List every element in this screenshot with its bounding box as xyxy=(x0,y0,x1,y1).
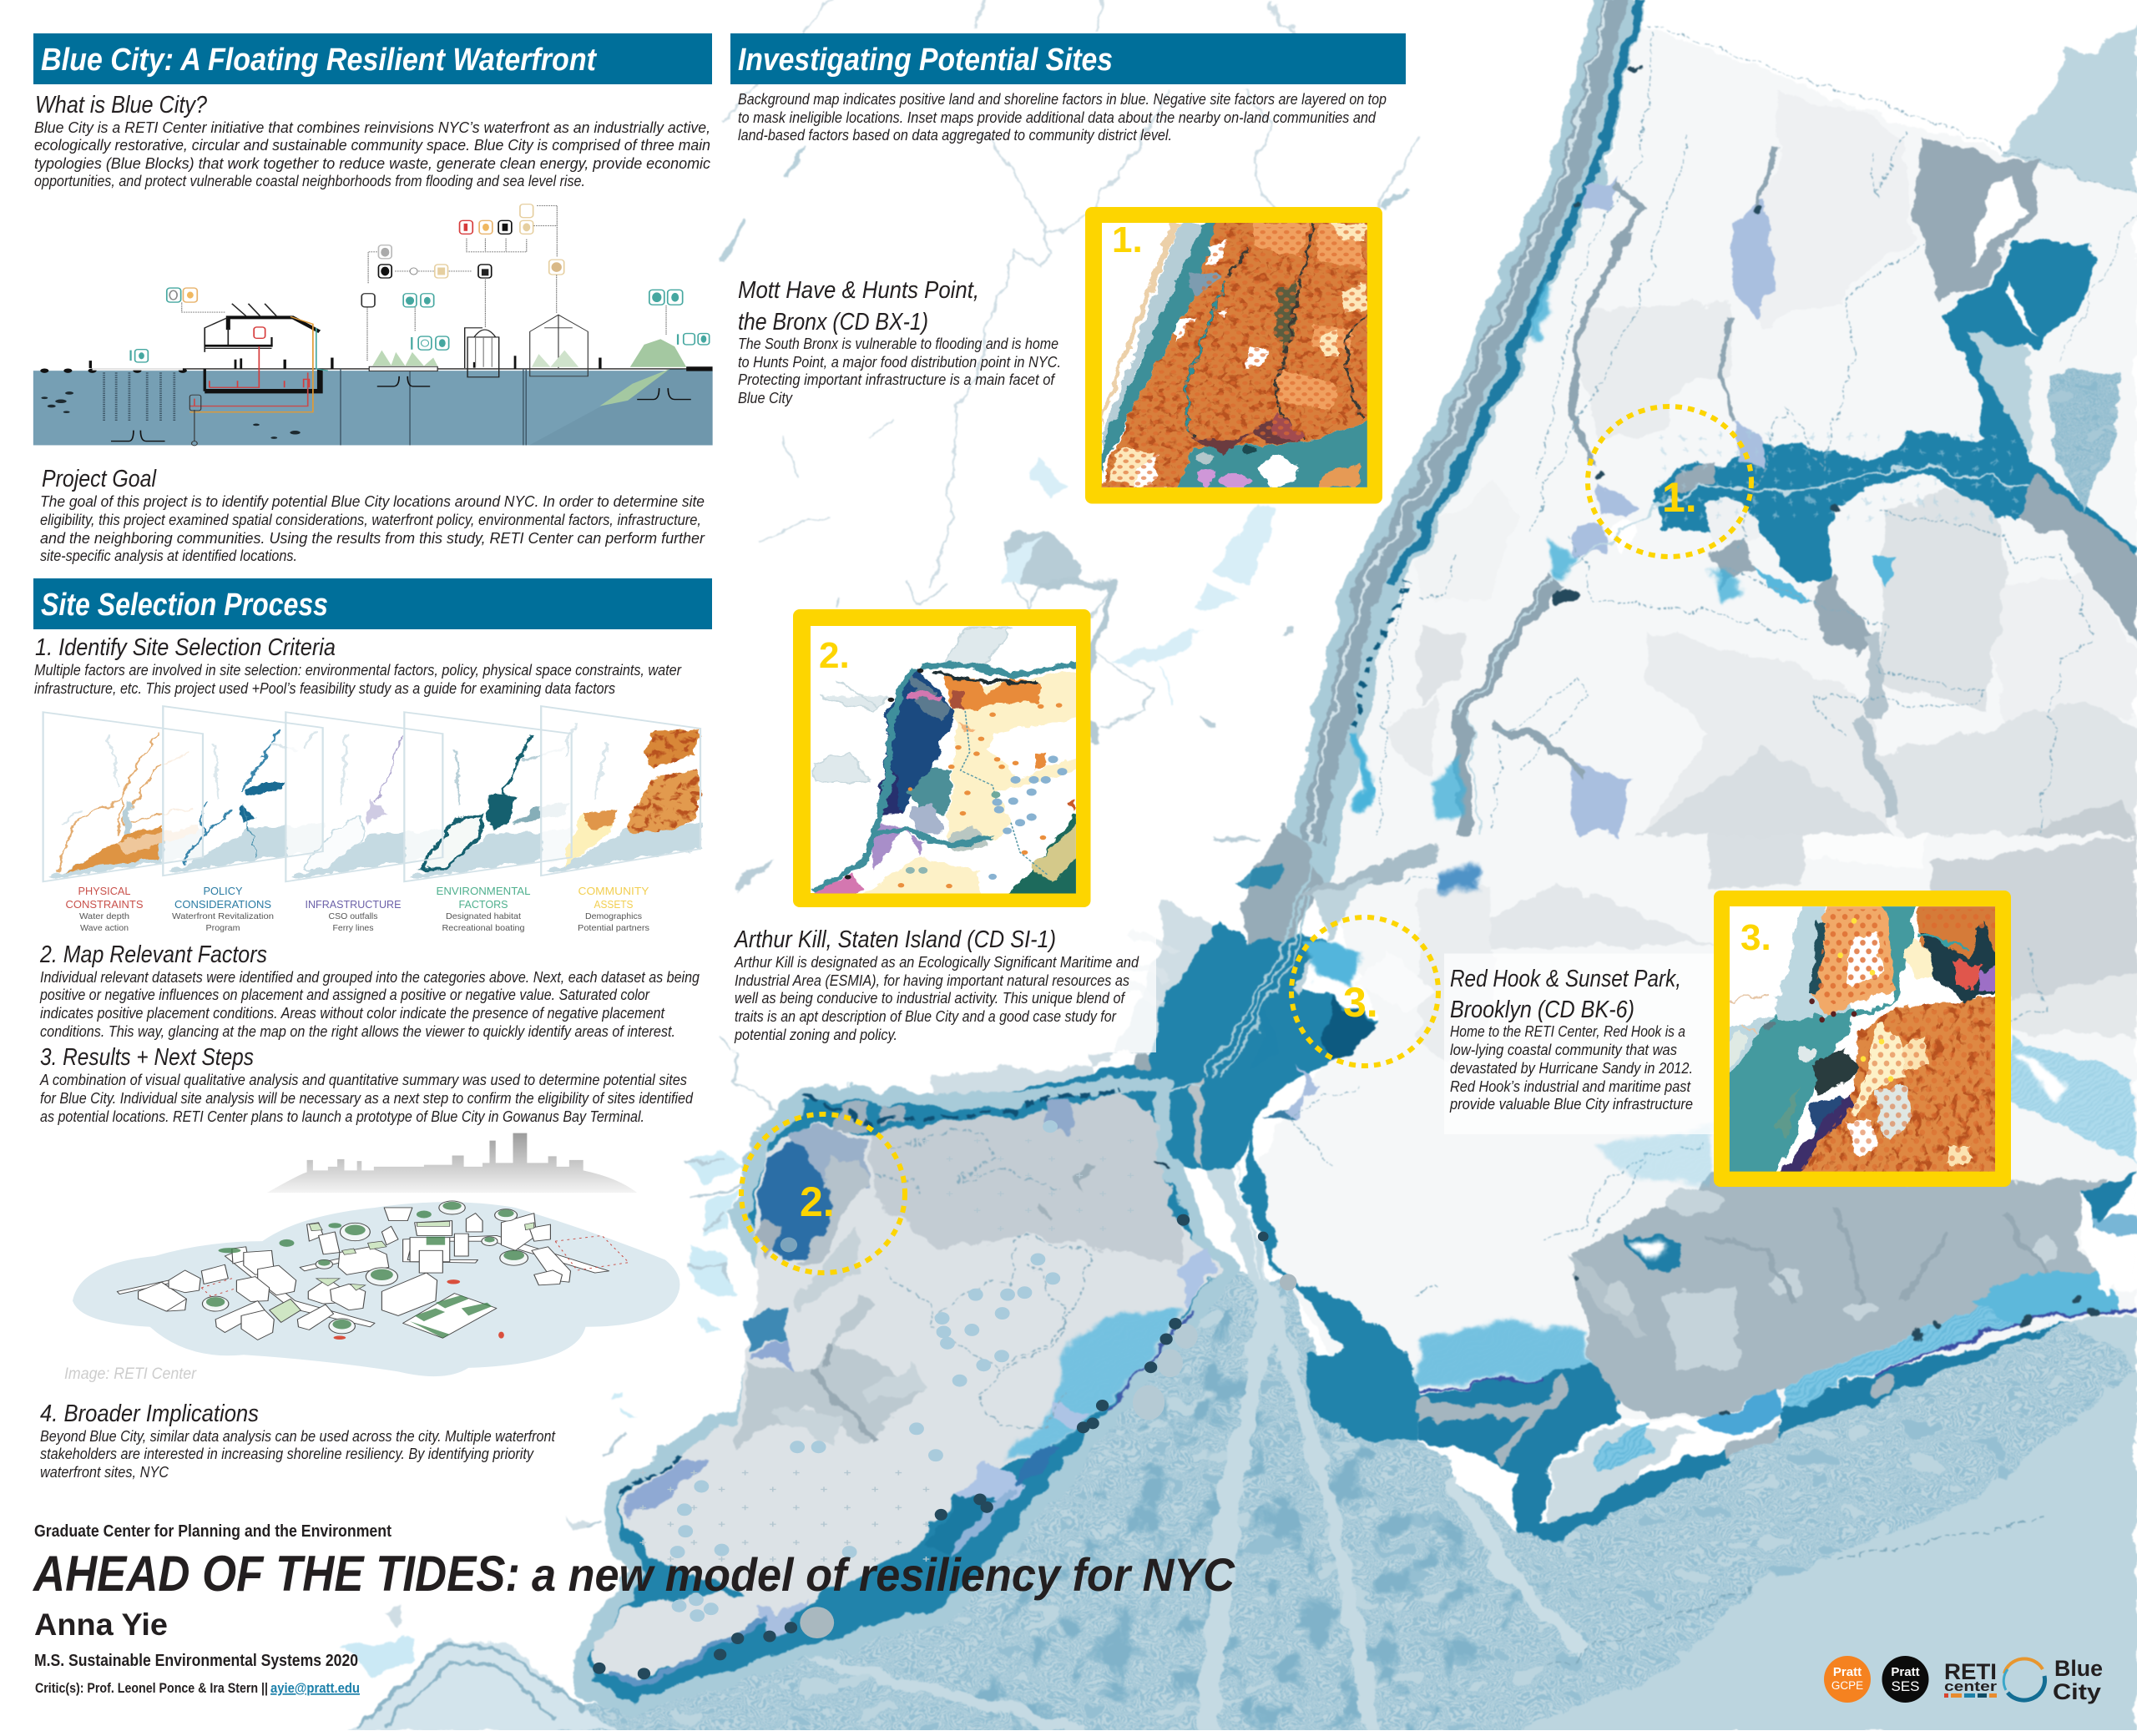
site marker 1 xyxy=(1588,406,1751,557)
hudson river band xyxy=(1300,0,1640,886)
text panel: Arthur Kill: Arthur Kill is designated as an Ecologically Significant Maritime and xyxy=(734,954,1139,971)
inset number 1: 1. xyxy=(1112,220,1143,260)
label: physical constraints: PHYSICAL xyxy=(78,886,131,897)
planted float xyxy=(369,366,437,371)
text block: Broader Implications: waterfront sites, NYC xyxy=(40,1464,169,1481)
label: physical constraints: Water depth xyxy=(79,911,129,921)
label: community assets: Potential partners xyxy=(578,923,649,933)
text block: Identify Site Selection Criteria: Multiple factors are involved in site selection: environmental factors, policy, physical space constraints, water xyxy=(34,662,682,679)
site marker 3: 3. xyxy=(1343,979,1378,1026)
label: environmental factors xyxy=(436,886,531,933)
white page footer strip xyxy=(0,1730,2137,1736)
water blob xyxy=(73,1202,679,1376)
NYC land mass xyxy=(1250,25,2137,1419)
text block: Broader Implications: 4. Broader Implications xyxy=(40,1400,259,1427)
seabed slope xyxy=(529,369,713,445)
text block: Map Relevant Factors: positive or negative influences on placement and assigned a positive or negative value. Saturated color xyxy=(39,987,650,1003)
text block: Mott Haven and Hunts Point: Protecting important infrastructure is a main facet of xyxy=(738,371,1056,388)
text panel: Red Hook: Red Hook’s industrial and maritime past xyxy=(1450,1078,1691,1095)
silo xyxy=(465,328,499,377)
shipping channels xyxy=(793,1160,1586,1736)
text panel: Arthur Kill xyxy=(730,916,1156,1052)
layer frames xyxy=(43,706,700,881)
text panel: Arthur Kill: well as being conducive to industrial activity. This unique blend of xyxy=(735,990,1126,1007)
label: physical constraints xyxy=(65,886,144,933)
greenhouse xyxy=(530,315,588,376)
flood zone trails xyxy=(871,1131,1095,1430)
north shore grey xyxy=(869,1091,1180,1259)
orange dot layer xyxy=(1107,227,1367,487)
text block: Project Goal: and the neighboring communities. Using the results from this study, RETI Center can perform further xyxy=(40,530,705,547)
critics and contact: ayie@pratt.edu xyxy=(270,1680,360,1696)
main title xyxy=(32,1546,1235,1602)
text block: map explanation: Background map indicates positive land and shoreline factors in blue. Negative site factors are layered on top xyxy=(738,91,1387,108)
text block: Mott Haven and Hunts Point: the Bronx (CD BX-1) xyxy=(738,309,928,336)
island land xyxy=(598,1091,1218,1678)
layer: physical constraints xyxy=(43,712,203,881)
text panel: Red Hook: Brooklyn (CD BK-6) xyxy=(1450,997,1634,1023)
raritan bay wetlands xyxy=(337,1513,619,1733)
header: Site Selection Process: Site Selection Process xyxy=(41,588,328,623)
text block: What is Blue City: What is Blue City? xyxy=(35,92,208,119)
text block: Mott Haven and Hunts Point xyxy=(738,277,1061,406)
ground line xyxy=(93,367,689,370)
water body xyxy=(33,371,713,445)
flow arrows xyxy=(111,376,691,442)
department line: Graduate Center for Planning and the Environment xyxy=(34,1522,392,1541)
label: infrastructure: INFRASTRUCTURE xyxy=(306,899,401,911)
wetlands grey xyxy=(734,1293,925,1446)
logo: Pratt GCPE: GCPE xyxy=(1831,1679,1863,1692)
header: Site Selection Process xyxy=(33,578,712,629)
logo: Pratt SES: Pratt xyxy=(1891,1665,1920,1679)
layer: community assets xyxy=(541,706,700,876)
label: community assets: Demographics xyxy=(585,911,642,921)
label: environmental factors: Designated habitat xyxy=(446,911,521,921)
inset map 1: South Bronx xyxy=(1085,207,1382,504)
Staten Island markers xyxy=(593,1120,1296,1679)
layered factor maps xyxy=(43,706,700,881)
floating building xyxy=(205,369,320,391)
text block: Mott Haven and Hunts Point: to Hunts Point, a major food distribution point in NYC. xyxy=(738,354,1061,371)
logo: Pratt SES xyxy=(1882,1656,1928,1703)
large grey circles xyxy=(800,1274,1296,1638)
text block: Broader Implications: stakeholders are interested in increasing shoreline resiliency. By identifying priority xyxy=(40,1446,534,1462)
site 2 marsh xyxy=(760,1127,835,1264)
text block: Map Relevant Factors: 2. Map Relevant Factors xyxy=(39,941,267,968)
buildings and decks xyxy=(117,1208,609,1340)
layer: infrastructure xyxy=(285,712,442,881)
label: infrastructure: CSO outfalls xyxy=(329,911,377,921)
text block: map explanation: to mask ineligible locations. Inset maps provide additional data about the nearby on-land communities and xyxy=(738,109,1377,126)
text block: Results + Next Steps: for Blue City. Individual site analysis will be necessary as a next step to confirm the eligibility of sites identified xyxy=(40,1090,694,1107)
label: policy considerations xyxy=(172,886,274,933)
illustration: floating city xyxy=(73,1133,679,1376)
ocean and lower bay xyxy=(534,1272,2137,1736)
label: physical constraints: Wave action xyxy=(80,923,129,933)
site marker 3 xyxy=(1291,917,1438,1066)
text block: Identify Site Selection Criteria xyxy=(34,634,682,697)
text block: What is Blue City: Blue City is a RETI Center initiative that combines reinvisions NYC’s waterfront as an industrially active, xyxy=(34,119,710,136)
text block: Mott Haven and Hunts Point: The South Bronx is vulnerable to flooding and is home xyxy=(738,336,1058,352)
logo: Pratt GCPE: Pratt xyxy=(1833,1665,1862,1679)
label: policy considerations: CONSIDERATIONS xyxy=(174,899,271,911)
land tone patches south xyxy=(1419,835,2137,1065)
NJ wetlands and rivers, central xyxy=(718,584,1291,1113)
text block: Map Relevant Factors xyxy=(39,941,700,1040)
layer: environmental factors xyxy=(404,712,572,881)
land tone patches xyxy=(1415,299,2137,840)
header: Investigating Potential Sites xyxy=(730,33,1406,84)
upper bay and harbor xyxy=(928,584,1436,1168)
label: policy considerations: Waterfront Revitalization xyxy=(172,911,274,921)
text block: Results + Next Steps: A combination of visual qualitative analysis and quantitative summary was used to determine potential sites xyxy=(39,1072,687,1088)
planter rings xyxy=(202,1201,528,1334)
Long Island Sound xyxy=(2000,25,2137,194)
text panel: Arthur Kill: Industrial Area (ESMIA), for having important natural resources as xyxy=(735,972,1129,989)
icon connector lines xyxy=(182,205,666,361)
fish xyxy=(41,391,301,439)
inset map 2: Arthur Kill xyxy=(793,609,1090,907)
text block: map explanation: land-based factors based on data aggregated to community district level. xyxy=(738,127,1172,144)
text block: Project Goal: Project Goal xyxy=(42,466,157,492)
land tone patch west xyxy=(1386,696,1436,776)
ocean darker blotches xyxy=(918,1302,1553,1736)
text block: Project Goal: The goal of this project is to identify potential Blue City locations around NYC. In order to determine site xyxy=(40,493,705,510)
logo: Pratt GCPE xyxy=(1824,1656,1871,1703)
factor category labels xyxy=(65,886,649,933)
text block: What is Blue City: ecologically restorative, circular and sustainable community space. Blue City is comprised of three main xyxy=(34,137,710,154)
New Jersey rivers xyxy=(718,0,1418,584)
image credit: Image: RETI Center xyxy=(64,1365,197,1383)
logo: RETI center xyxy=(1944,1659,1997,1698)
text block: Results + Next Steps: as potential locations. RETI Center plans to launch a prototype of Blue City in Gowanus Bay Terminal. xyxy=(40,1108,644,1125)
text panel: Arthur Kill: Arthur Kill, Staten Island (CD SI-1) xyxy=(733,926,1056,953)
header: Blue City xyxy=(33,33,712,84)
text block: What is Blue City xyxy=(34,92,710,189)
main title: AHEAD OF THE TIDES: xyxy=(32,1546,520,1602)
logo: RETI center: center xyxy=(1944,1678,1997,1694)
label: policy considerations: POLICY xyxy=(204,886,243,897)
text block: Map Relevant Factors: conditions. This way, glancing at the map on the right allows the viewer to quickly identify areas of interest. xyxy=(40,1023,675,1040)
main title: a new model of resiliency for NYC xyxy=(532,1548,1235,1601)
text block: Project Goal xyxy=(40,466,705,564)
text block: What is Blue City: typologies (Blue Blocks) that work together to reduce waste, generate clean energy, provide economic xyxy=(34,155,710,172)
green roofs xyxy=(309,1221,534,1290)
header: Blue City: Blue City: A Floating Resilient Waterfront xyxy=(41,43,597,78)
site marker 2 xyxy=(741,1114,905,1273)
inset number 3: 3. xyxy=(1740,917,1771,958)
text panel: Red Hook: low-lying coastal community that was xyxy=(1450,1042,1677,1058)
label: community assets: ASSETS xyxy=(594,899,633,911)
logo: RETI center: RETI xyxy=(1944,1659,1997,1684)
text panel: Red Hook: devastated by Hurricane Sandy in 2012. xyxy=(1450,1060,1693,1077)
text block: Map Relevant Factors: indicates positive placement conditions. Areas without color indicate the presence of negative placement xyxy=(40,1005,665,1022)
label: policy considerations: Program xyxy=(205,923,240,933)
label: community assets xyxy=(578,886,649,933)
Brooklyn southwest shore band xyxy=(1245,1127,1419,1440)
inset number 2: 2. xyxy=(819,635,850,676)
section diagram: blue blocks xyxy=(33,204,713,446)
critics and contact: Critic(s): Prof. Leonel Ponce & Ira Stern || xyxy=(35,1680,268,1696)
author name: Anna Yie xyxy=(34,1607,168,1642)
light blue dots xyxy=(670,1120,1060,1622)
text block: Identify Site Selection Criteria: 1. Identify Site Selection Criteria xyxy=(35,634,336,661)
small icons xyxy=(135,204,710,362)
mooring lines xyxy=(201,1235,629,1296)
label: environmental factors: Recreational boating xyxy=(442,923,525,933)
Staten Island xyxy=(584,1085,1419,1706)
degree line: M.S. Sustainable Environmental Systems 2020 xyxy=(34,1652,358,1670)
label: physical constraints: CONSTRAINTS xyxy=(65,899,144,911)
shoreline band xyxy=(584,1085,1229,1706)
inset 3 dot layers xyxy=(1799,910,1995,1172)
planted slope xyxy=(599,339,686,406)
text block: Map Relevant Factors: Individual relevant datasets were identified and grouped into the categories above. Next, each dataset as being xyxy=(40,969,700,986)
text block: Mott Haven and Hunts Point: Mott Have & Hunts Point, xyxy=(738,277,979,304)
label: environmental factors: ENVIRONMENTAL xyxy=(436,886,531,897)
label: community assets: COMMUNITY xyxy=(578,886,649,897)
label: environmental factors: FACTORS xyxy=(459,899,508,911)
logo: Blue City xyxy=(2003,1656,2103,1704)
text block: Broader Implications xyxy=(40,1400,556,1481)
brooklyn south shore xyxy=(1415,863,2137,1539)
south shore blue hatch xyxy=(1005,1305,1186,1459)
east river and bronx shoreline xyxy=(1419,24,2137,835)
logo: Pratt SES: SES xyxy=(1891,1678,1920,1694)
arthur kill wetlands xyxy=(584,1148,744,1525)
logo: Blue City: Blue xyxy=(2054,1656,2103,1681)
text block: Results + Next Steps: 3. Results + Next Steps xyxy=(40,1044,254,1071)
logo: Blue City: City xyxy=(2053,1679,2101,1704)
text block: Project Goal: site-specific analysis at identified locations. xyxy=(40,548,297,564)
ocean contour texture xyxy=(534,1272,2137,1736)
skyline xyxy=(267,1133,637,1193)
text block: Results + Next Steps xyxy=(39,1044,694,1125)
text block: Broader Implications: Beyond Blue City, similar data analysis can be used across the city. Multiple waterfront xyxy=(40,1428,556,1445)
text panel: Red Hook xyxy=(1444,953,1714,1134)
plus marks xyxy=(638,1459,936,1567)
trails and site dots xyxy=(845,669,1068,888)
site marker 1: 1. xyxy=(1662,474,1697,521)
text panel: Arthur Kill: potential zoning and policy. xyxy=(734,1027,897,1043)
label: infrastructure: Ferry lines xyxy=(332,923,374,933)
site marker 2: 2. xyxy=(800,1178,835,1225)
label: infrastructure xyxy=(306,899,401,933)
kelp lines xyxy=(104,372,174,421)
text block: Mott Haven and Hunts Point: Blue City xyxy=(738,390,793,406)
text panel: Red Hook: Home to the RETI Center, Red Hook is a xyxy=(1450,1023,1685,1040)
text block: Project Goal: eligibility, this project examined spatial considerations, waterfront policy, environmental factors, infrastructure, xyxy=(40,512,701,528)
text block: Identify Site Selection Criteria: infrastructure, etc. This project used +Pool’s feasibility study as a guide for examining data factors xyxy=(34,680,615,697)
header: Investigating Potential Sites: Investigating Potential Sites xyxy=(738,43,1113,78)
text block: What is Blue City: opportunities, and protect vulnerable coastal neighborhoods from flooding and sea level rise. xyxy=(34,173,585,189)
dark dots xyxy=(593,1214,1269,1679)
text panel: Arthur Kill: traits is an apt description of Blue City and a good case study for xyxy=(735,1008,1117,1025)
text panel: Red Hook: provide valuable Blue City infrastructure xyxy=(1449,1096,1693,1113)
text panel: Red Hook: Red Hook & Sunset Park, xyxy=(1450,966,1681,992)
layer: policy considerations xyxy=(163,706,323,876)
Jamaica Bay grey wetlands xyxy=(1570,1173,2105,1416)
text block: map explanation xyxy=(738,91,1387,144)
inset map 3: Red Hook xyxy=(1714,891,2011,1187)
boats xyxy=(334,1279,504,1340)
